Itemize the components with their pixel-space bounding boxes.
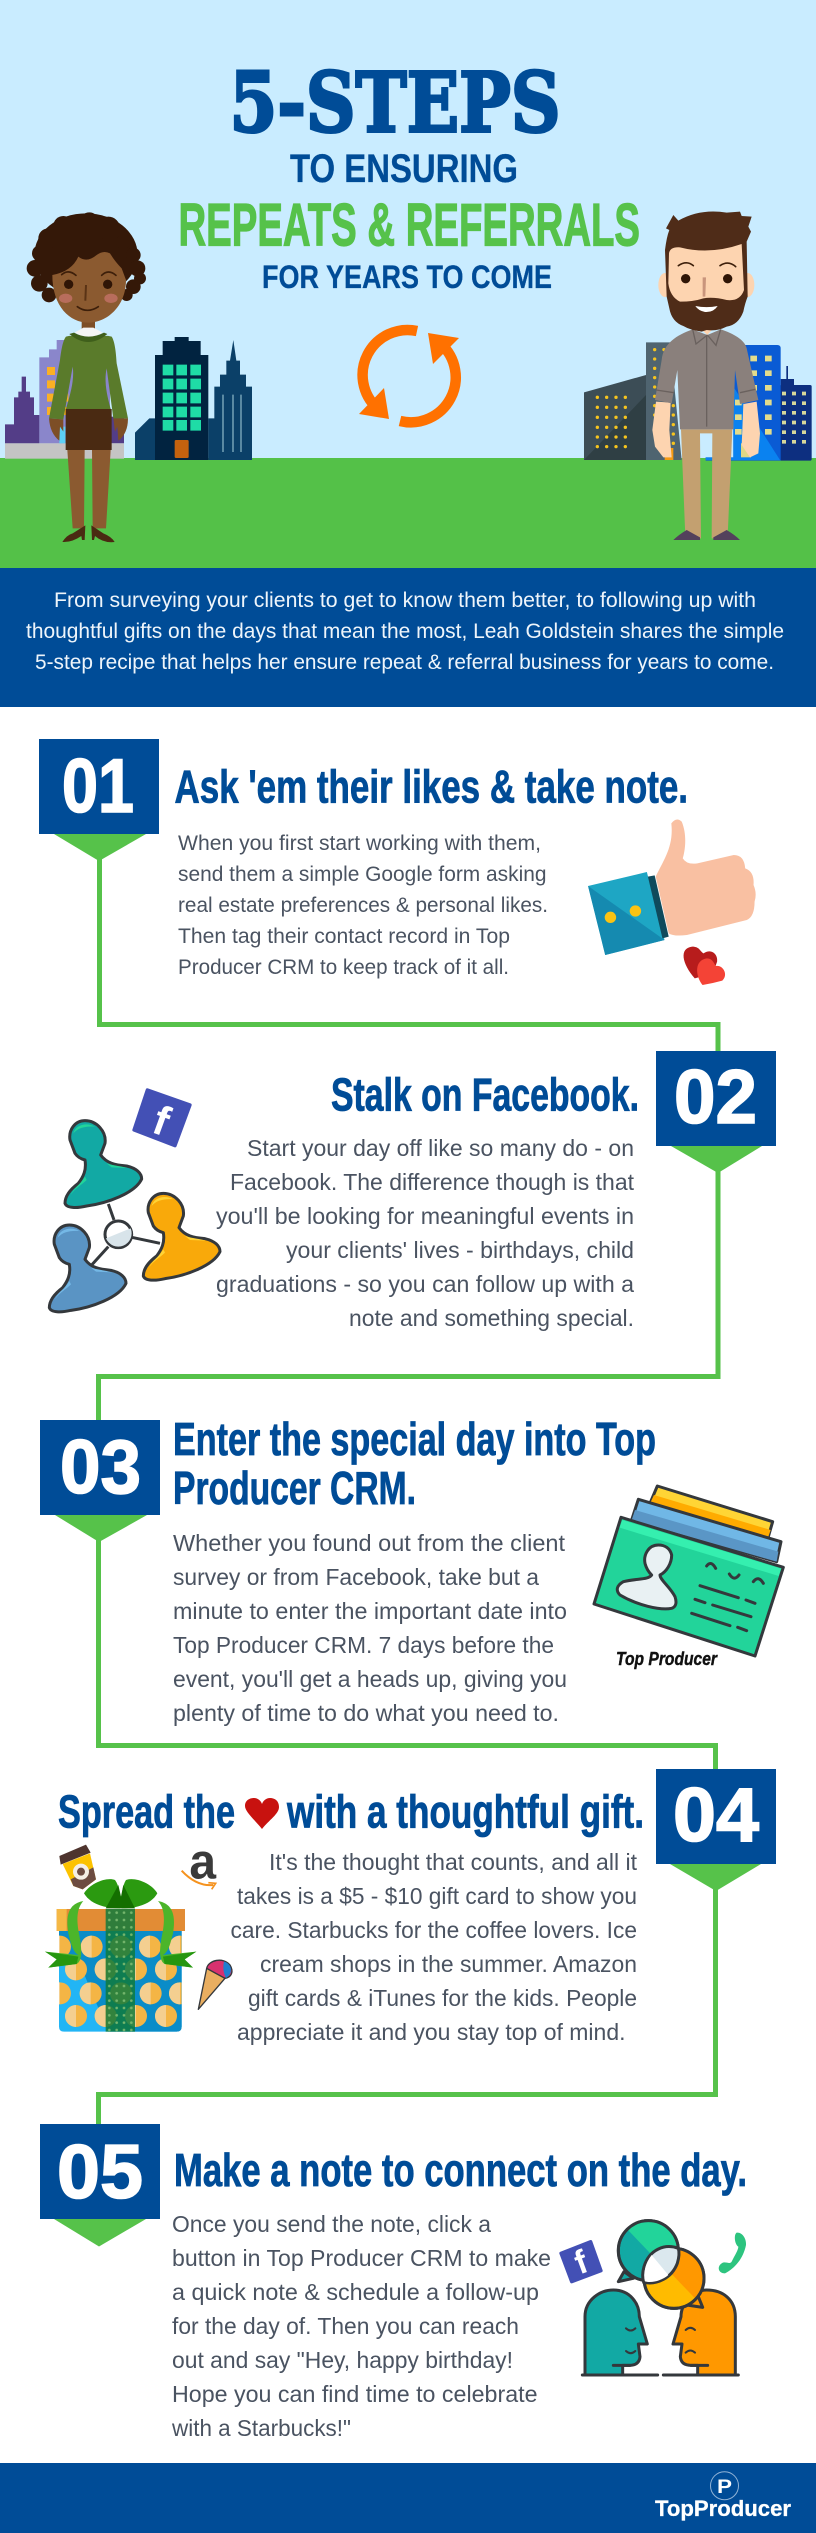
body 5: a quick note & schedule a follow-up [172, 2279, 539, 2305]
body 1: send them a simple Google form asking [178, 863, 546, 886]
footer logo: P [717, 2477, 732, 2498]
body 2: graduations - so you can follow up with a [216, 1271, 634, 1297]
refresh arrows [359, 330, 459, 422]
number badge 05: 05 [57, 2130, 143, 2215]
number badge 02: 02 [674, 1055, 757, 1140]
intro band [0, 568, 816, 707]
body 4: appreciate it and you stay top of mind. [237, 2019, 626, 2045]
body 5: Once you send the note, click a [172, 2211, 491, 2237]
body 4: gift cards & iTunes for the kids. People [248, 1985, 637, 2011]
body 2 [216, 1135, 635, 1331]
body 4: takes is a $5 - $10 gift card to show you [237, 1883, 637, 1909]
body 3: survey or from Facebook, take but a [173, 1564, 539, 1590]
body 4: care. Starbucks for the coffee lovers. Ice [230, 1917, 637, 1943]
body 5: out and say "Hey, happy birthday! [172, 2347, 513, 2373]
body 3: event, you'll get a heads up, giving you [173, 1666, 567, 1692]
body 2: your clients' lives - birthdays, child [286, 1237, 634, 1263]
step 4 [45, 1769, 776, 2045]
number badge 02 [656, 1051, 776, 1173]
body 5 [171, 2211, 551, 2441]
body 1: Producer CRM to keep track of it all. [178, 956, 509, 979]
heading 4 [58, 1786, 644, 1838]
heading 4: Spread the [58, 1786, 235, 1838]
icon: conversation: f [570, 2243, 594, 2282]
body 3: plenty of time to do what you need to. [173, 1700, 559, 1726]
title block: TO ENSURING [290, 147, 518, 191]
icon: contact cards [594, 1486, 783, 1656]
body 4: cream shops in the summer. Amazon [260, 1951, 637, 1977]
number badge 04 [656, 1769, 776, 1891]
body 5: with a Starbucks!" [171, 2415, 351, 2441]
body 3 [173, 1530, 567, 1726]
body 3: minute to enter the important date into [173, 1598, 567, 1624]
body 5: for the day of. Then you can reach [172, 2313, 519, 2339]
body 4 [230, 1849, 638, 2045]
heading 3: Enter the special day into Top [173, 1413, 656, 1465]
connector line [98, 850, 718, 2130]
title block [178, 56, 640, 295]
body 1: When you first start working with them, [178, 832, 541, 855]
body 2: note and something special. [349, 1305, 634, 1331]
icon: social network people [49, 1090, 220, 1312]
title block: FOR YEARS TO COME [262, 259, 552, 295]
number badge 04: 04 [673, 1773, 759, 1858]
hero panel [0, 0, 816, 568]
logo: Top Producer: Top Producer [616, 1649, 718, 1669]
body 2: Facebook. The difference though is that [230, 1169, 635, 1195]
number badge 03: 03 [60, 1425, 141, 1510]
number badge 05 [40, 2124, 160, 2246]
step 5 [40, 2124, 747, 2441]
body 2: Start your day off like so many do - on [247, 1135, 634, 1161]
footer logo [655, 2472, 791, 2521]
step 2 [49, 1051, 776, 1331]
heading 3 [173, 1413, 656, 1514]
body 5: Hope you can find time to celebrate [172, 2381, 538, 2407]
body 3: Top Producer CRM. 7 days before the [173, 1632, 554, 1658]
step 3 [40, 1413, 783, 1726]
intro band: From surveying your clients to get to know them better, to following up with [54, 589, 756, 612]
right skyline [584, 342, 812, 461]
body 5: button in Top Producer CRM to make [172, 2245, 551, 2271]
heading 2: Stalk on Facebook. [331, 1068, 639, 1120]
heading 4: with a thoughtful gift. [286, 1786, 644, 1838]
icon: conversation [561, 2217, 746, 2375]
woman character [27, 212, 146, 542]
icon: social network people: f [147, 1096, 176, 1145]
intro band: 5-step recipe that helps her ensure repeat & referral business for years to come. [35, 651, 774, 674]
body 1: real estate preferences & personal likes. [178, 894, 548, 917]
body 2: you'll be looking for meaningful events in [216, 1203, 634, 1229]
body 1: Then tag their contact record in Top [178, 925, 510, 948]
left skyline [5, 337, 252, 460]
number badge 01: 01 [62, 744, 134, 829]
icon: thumbs up with hearts [588, 820, 756, 985]
number badge 01 [39, 739, 159, 861]
intro band: thoughtful gifts on the days that mean the most, Leah Goldstein shares the simple [26, 620, 784, 643]
body 1 [178, 832, 548, 979]
footer logo: TopProducer [655, 2496, 791, 2521]
step 1 [39, 739, 756, 985]
title block: 5-STEPS [230, 56, 560, 152]
number badge 03 [40, 1420, 160, 1542]
icon: gift box with coffee, amazon, ice cream: a [189, 1833, 217, 1889]
body 3: Whether you found out from the client [173, 1530, 566, 1556]
body 4: It's the thought that counts, and all it [269, 1849, 638, 1875]
footer [0, 2463, 816, 2533]
heading 3: Producer CRM. [173, 1462, 416, 1514]
icon: gift box with coffee, amazon, ice cream [45, 1833, 232, 2032]
man character [652, 212, 760, 540]
